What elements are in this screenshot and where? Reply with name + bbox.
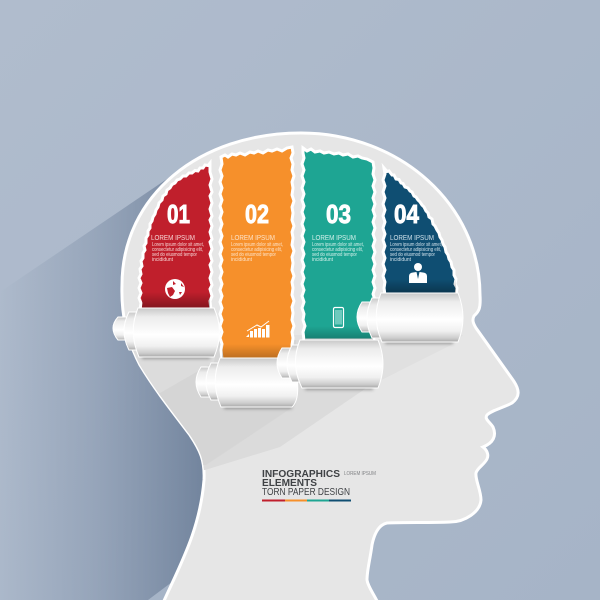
torn red paper <box>139 163 212 310</box>
panel bottom shade <box>386 279 456 295</box>
body text: Lorem ipsum dolor sit amet, <box>231 242 283 248</box>
heading: LOREM IPSUM <box>312 235 356 242</box>
panel bottom shade <box>142 292 210 310</box>
body text: consectetur adipisicing elit, <box>312 247 363 253</box>
icon: smartphone <box>334 308 344 328</box>
torn orange paper <box>220 147 294 359</box>
body text: incididunt <box>231 257 253 263</box>
icon: businessman <box>409 263 427 283</box>
heading: LOREM IPSUM <box>390 235 434 242</box>
infographic canvas <box>33 132 520 600</box>
paper roll 2 (orange) <box>196 358 298 409</box>
heading: LOREM IPSUM <box>151 235 195 242</box>
long head shadow <box>0 160 230 600</box>
panel 2: orange <box>220 147 294 359</box>
panel 1: red <box>139 163 212 310</box>
body text <box>312 242 364 263</box>
body text: sed do eiusmod tempor <box>152 252 197 258</box>
body text: Lorem ipsum dolor sit amet, <box>312 242 364 248</box>
colour bar <box>262 500 351 502</box>
head silhouette <box>122 133 518 600</box>
torn teal paper <box>302 148 375 340</box>
body text: incididunt <box>152 257 174 263</box>
paper roll 1 (red) <box>113 308 220 359</box>
title block <box>262 468 376 502</box>
torn navy paper <box>383 168 457 295</box>
body text: Lorem ipsum dolor sit amet, <box>390 242 442 248</box>
subtitle: TORN PAPER DESIGN <box>262 486 350 498</box>
heading: LOREM IPSUM <box>231 235 275 242</box>
body text: sed do eiusmod tempor <box>390 252 435 258</box>
body text: consectetur adipisicing elit, <box>390 247 441 253</box>
title: elements: ELEMENTS <box>262 477 317 489</box>
number 04: 04 <box>394 199 419 229</box>
number 01: 01 <box>167 199 190 229</box>
panel 3: teal <box>302 148 375 340</box>
panel bottom shade <box>305 326 373 340</box>
number 03: 03 <box>326 199 351 229</box>
body text: sed do eiusmod tempor <box>231 252 276 258</box>
paper roll 4 (navy) <box>357 293 463 344</box>
body text: incididunt <box>390 257 412 263</box>
body text <box>152 242 204 263</box>
body text <box>390 242 442 263</box>
small light corner at bottom <box>148 582 172 600</box>
icon: rising bar chart <box>246 321 270 338</box>
tag: lorem ipsum: LOREM IPSUM <box>344 471 376 477</box>
body text: consectetur adipisicing elit, <box>231 247 282 253</box>
body text: incididunt <box>312 257 334 263</box>
body text: consectetur adipisicing elit, <box>152 247 203 253</box>
body text: Lorem ipsum dolor sit amet, <box>152 242 204 248</box>
panel bottom shade <box>222 344 293 359</box>
number 02: 02 <box>245 199 269 229</box>
title: infographics: INFOGRAPHICS <box>262 468 340 480</box>
body text <box>231 242 283 263</box>
icon: globe <box>165 279 185 299</box>
panel 4: navy <box>383 168 457 295</box>
roll cast shadows on head <box>133 340 362 470</box>
paper roll 3 (teal) <box>277 340 383 390</box>
body text: sed do eiusmod tempor <box>312 252 357 258</box>
